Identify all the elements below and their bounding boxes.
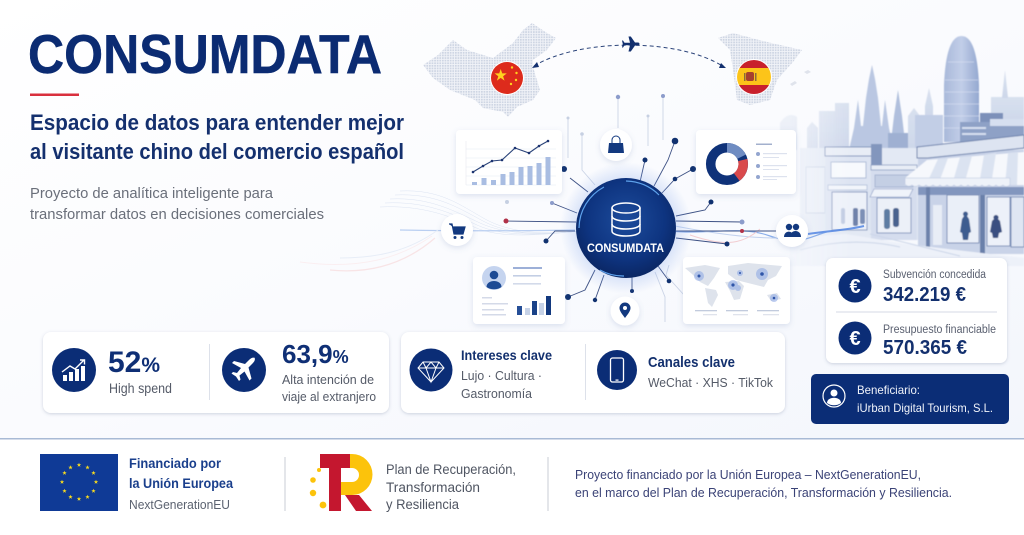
shop C with striped awning [905,135,1024,255]
panel: visitor profile [473,257,565,324]
text: recovery plan: Transformación [386,480,480,495]
city skyline illustration [780,36,1024,266]
stat: grant awarded [883,269,987,306]
subtitle [30,110,404,164]
text: key channels [648,354,773,390]
icon: shopping bag [600,129,632,161]
icon: euro: € [849,276,861,298]
text: funding statement [575,468,952,500]
text: funded by the EU: la Unión Europea [129,475,233,491]
icon: database [612,203,640,236]
stat: eligible budget: Presupuesto financiable [883,324,996,336]
text: funded by the EU [129,455,233,512]
icon: euro [838,270,872,302]
stat: eligible budget: 570.365 € [883,337,967,359]
data waves [300,191,864,271]
description [30,185,324,223]
street [824,234,1023,265]
panel: beneficiary: iUrban Digital Tourism, S.L. [857,401,993,415]
icon: shopping cart [441,214,473,246]
map: China [423,23,556,117]
stat: 63,9% [282,339,376,404]
text: recovery plan: y Resiliencia [386,497,459,512]
gherkin tower [944,36,979,142]
cathedral [850,66,890,148]
title: CONSUMDATA [28,23,382,85]
stat: 52%: High spend [109,381,172,396]
network connectors [506,96,780,322]
map: Spain [718,33,811,105]
accent rule [30,94,79,96]
flag: China [490,61,524,95]
text: recovery plan: Plan de Recuperación, [386,462,516,477]
icon: user [823,385,845,407]
flight arc with plane [532,36,726,68]
text: key interests: Intereses clave [461,347,552,363]
logo: recovery plan TR [310,454,372,511]
text: funding statement: en el marco del Plan de Recuperación, Transformación y Resiliencia. [575,486,952,500]
stat: 63,9%: Alta intención de [282,372,374,387]
panel: funding [826,258,1007,363]
text: key interests [461,347,552,401]
text: funded by the EU: NextGenerationEU [129,497,230,512]
icon: plane [622,36,640,52]
text: key channels: WeChat · XHS · TikTok [648,375,773,390]
logo: EU flag [40,454,118,511]
subtitle: al visitante chino del comercio español [30,139,404,164]
stat: eligible budget [883,324,996,359]
hub: CONSUMDATA: CONSUMDATA [587,241,664,255]
panel: beneficiary: Beneficiario: [857,383,920,397]
icon: airplane [222,348,266,392]
flag: Spain [736,59,772,95]
stat: 63,9%: viaje al extranjero [282,389,376,404]
text: key interests: Lujo · Cultura · [461,368,542,383]
stat: 52%: 52% [108,346,160,379]
hub: CONSUMDATA [560,162,692,294]
icon: location pin [610,296,640,326]
stat: grant awarded: 342.219 € [883,284,966,306]
panel: line and bar chart [456,130,562,194]
description: transformar datos en decisiones comerciales [30,206,324,223]
icon: diamond [410,348,452,392]
stat: 63,9%: 63,9% [282,339,349,369]
panel: donut chart [696,130,796,194]
text: key interests: Gastronomía [461,386,533,401]
text: funded by the EU: Financiado por [129,455,222,471]
icon: growth chart [52,348,96,392]
shop A [825,144,882,230]
stat: grant awarded: Subvención concedida [883,269,987,281]
subtitle: Espacio de datos para entender mejor [30,110,404,135]
far shop [806,167,825,213]
text: funding statement: Proyecto financiado por la Unión Europea – NextGenerationEU, [575,468,921,482]
icon: euro [838,322,872,354]
icon: people [776,215,808,247]
shop B [870,165,917,240]
panel: interests and channels [401,332,785,413]
distant buildings [780,70,1024,151]
connector nodes [504,94,744,302]
description: Proyecto de analítica inteligente para [30,185,274,202]
text: key channels: Canales clave [648,354,735,371]
icon: euro: € [849,328,861,350]
footer band [0,438,1024,535]
icon: smartphone [597,350,637,390]
panel: key statistics [43,332,389,413]
panel: world map [683,257,790,324]
panel: beneficiary [811,374,1009,424]
stat: 52% [108,346,172,396]
text: recovery plan [386,462,516,512]
